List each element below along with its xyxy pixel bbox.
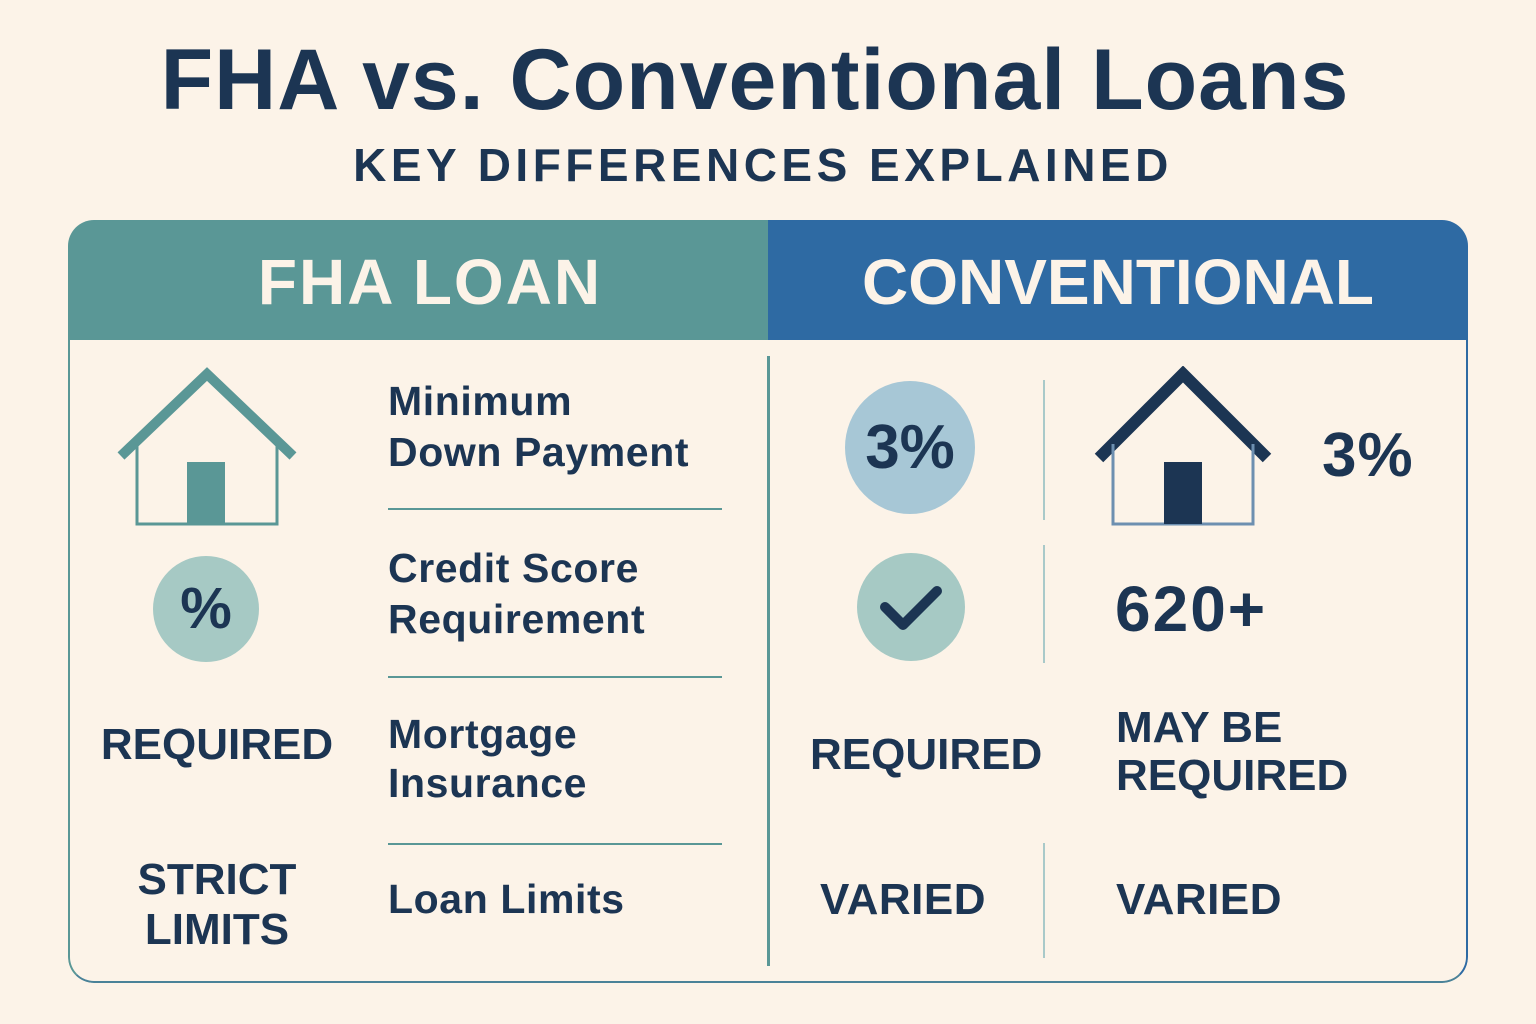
text: FHA loan limits (138, 855, 296, 954)
text: 620+: 620+ (1115, 573, 1267, 645)
panel: conventional header (768, 220, 1468, 340)
label: down payment: Minimum (388, 378, 572, 424)
label: mortgage insurance: Insurance (388, 760, 587, 806)
label: credit score (388, 545, 645, 642)
label: credit score: Requirement (388, 596, 645, 642)
label: down payment: Down Payment (388, 429, 689, 475)
label: loan limits: Loan Limits (388, 876, 625, 922)
icon: percent circle: % (180, 576, 232, 641)
text: varied right: VARIED (1116, 875, 1282, 924)
panel: conventional header: CONVENTIONAL (862, 246, 1374, 318)
label: down payment (388, 378, 689, 475)
panel: comparison table (68, 220, 1468, 983)
text: FHA loan limits: LIMITS (145, 905, 289, 954)
panel: FHA header (68, 220, 792, 340)
label: credit score: Credit Score (388, 545, 639, 591)
label: mortgage insurance (388, 711, 587, 806)
text: 3% conventional: 3% (1322, 421, 1414, 490)
panel: FHA header: FHA LOAN (258, 246, 602, 318)
icon: navy house (1094, 366, 1272, 526)
text: may be required: MAY BE (1116, 703, 1282, 752)
icon: 3% circle (845, 381, 975, 514)
icon: check circle (857, 553, 965, 661)
text: may be required: REQUIRED (1116, 751, 1348, 800)
text: FHA loan limits: STRICT (138, 855, 296, 904)
text: may be required (1116, 703, 1348, 800)
text: varied left: VARIED (820, 875, 986, 924)
title: FHA vs. Conventional Loans (161, 32, 1349, 128)
icon: 3% circle: 3% (865, 413, 955, 482)
subtitle: KEY DIFFERENCES EXPLAINED (353, 139, 1173, 191)
icon: percent circle (153, 556, 259, 662)
text: FHA mortgage insurance: REQUIRED (101, 720, 333, 769)
icon: teal house (118, 367, 296, 526)
label: mortgage insurance: Mortgage (388, 711, 577, 757)
text: conventional required: REQUIRED (810, 730, 1042, 779)
